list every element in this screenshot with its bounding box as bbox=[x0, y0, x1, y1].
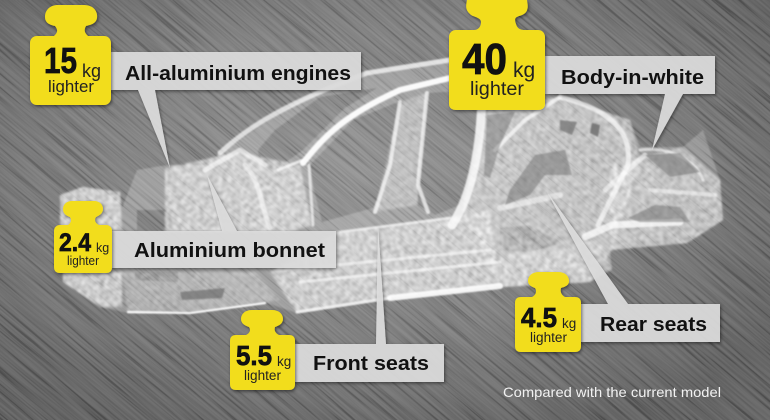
callout label: Body-in-white bbox=[561, 67, 704, 89]
weight icon bbox=[230, 310, 295, 390]
lighter caption: lighter bbox=[470, 79, 525, 100]
weight value: 15 bbox=[44, 40, 77, 81]
unit: kg bbox=[513, 59, 535, 82]
mottled metal structure bbox=[60, 93, 723, 313]
weight icon bbox=[515, 272, 581, 352]
rear structure openings bbox=[180, 112, 700, 300]
unit: kg bbox=[277, 354, 291, 369]
unit: kg bbox=[562, 316, 576, 331]
weight value: 4.5 bbox=[521, 302, 557, 333]
callout: front seats bbox=[295, 225, 444, 382]
callout: rear seats bbox=[547, 192, 720, 342]
callout: all-aluminium engines bbox=[111, 52, 361, 168]
callout label: All-aluminium engines bbox=[125, 63, 351, 85]
structural highlights bbox=[128, 60, 715, 313]
lighter caption: lighter bbox=[67, 254, 99, 268]
lighter caption: lighter bbox=[244, 368, 281, 383]
translucent shell with window openings bbox=[60, 58, 723, 313]
lighter caption: lighter bbox=[48, 78, 95, 96]
weight icon bbox=[449, 0, 545, 110]
callout panel bbox=[111, 52, 361, 168]
weight badge: 2.4 kg lighter bbox=[54, 201, 112, 273]
lighter caption: lighter bbox=[530, 330, 567, 345]
weight icon bbox=[30, 5, 111, 105]
weight value: 40 bbox=[462, 35, 507, 84]
callout label: Front seats bbox=[313, 353, 429, 375]
weight badge: 4.5 kg lighter bbox=[515, 272, 581, 352]
weight badge: 15 kg lighter bbox=[30, 5, 111, 105]
weight badge: 40 kg lighter bbox=[449, 0, 545, 110]
callout: body-in-white bbox=[545, 56, 715, 150]
callout panel bbox=[547, 192, 720, 342]
callout panel bbox=[295, 225, 444, 382]
callout label: Rear seats bbox=[600, 314, 707, 336]
weight icon bbox=[54, 201, 112, 273]
callout: aluminium bonnet bbox=[112, 175, 336, 268]
car body shell bbox=[60, 58, 723, 313]
weight value: 5.5 bbox=[236, 340, 272, 371]
callout panel bbox=[112, 175, 336, 268]
callout label: Aluminium bonnet bbox=[134, 240, 325, 262]
weight value: 2.4 bbox=[59, 229, 91, 257]
weight badge: 5.5 kg lighter bbox=[230, 310, 295, 390]
unit: kg bbox=[96, 241, 109, 255]
callout panel bbox=[545, 56, 715, 150]
unit: kg bbox=[82, 61, 101, 81]
footnote: Compared with the current model bbox=[503, 384, 721, 400]
